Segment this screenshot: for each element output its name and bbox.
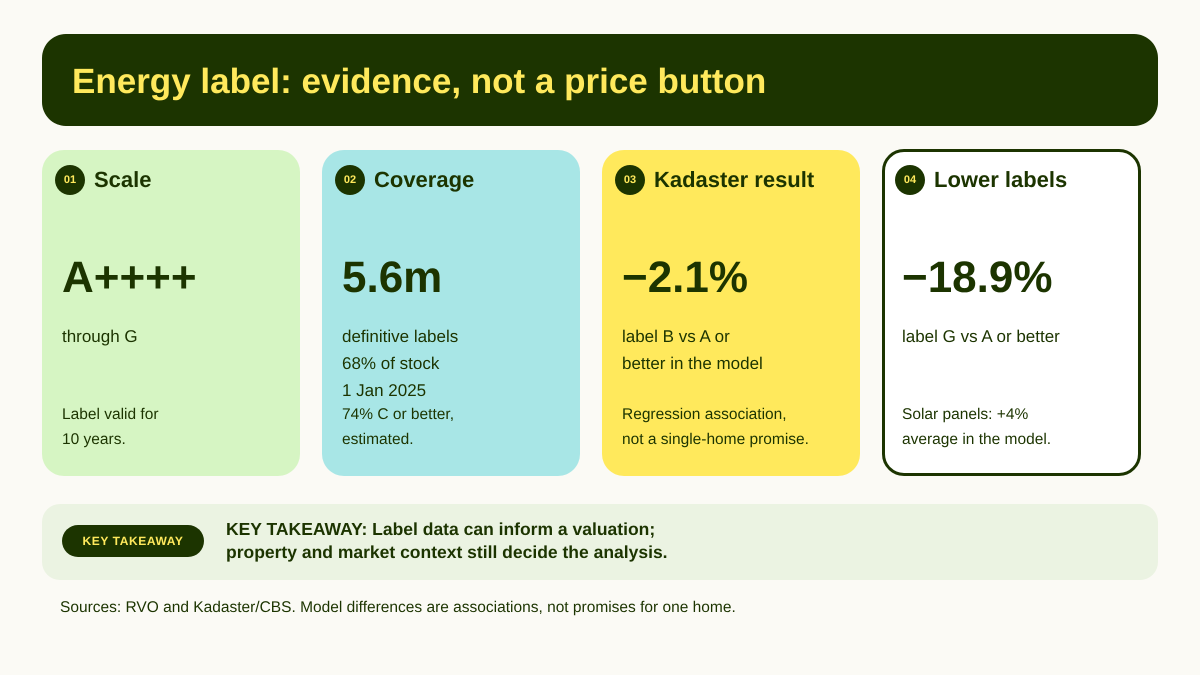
text: sources: Sources: RVO and Kadaster/CBS. Model differences are associations, not promises for one home. (60, 599, 736, 616)
badge 02 (335, 165, 365, 195)
heading: kadaster result: Kadaster result (654, 167, 814, 192)
title banner: Energy label: evidence, not a price button (72, 62, 766, 101)
note: solar panels (902, 406, 1051, 448)
text: takeaway message: KEY TAKEAWAY: Label data can inform a valuation; (226, 519, 655, 539)
pill: key takeaway tag (62, 525, 204, 557)
badge 03 (615, 165, 645, 195)
stat: -2.1%: −2.1% (622, 253, 748, 302)
heading: lower labels: Lower labels (934, 167, 1067, 192)
note: label validity: 10 years. (62, 431, 126, 448)
note: label validity: Label valid for (62, 406, 159, 423)
panel: scale (42, 150, 300, 476)
badge 04: 04 (904, 174, 916, 186)
text: kadaster description (622, 327, 763, 373)
text: takeaway message: property and market context still decide the analysis. (226, 542, 668, 562)
note: regression caveat: not a single-home promise. (622, 431, 809, 448)
badge 03: 03 (624, 174, 636, 186)
note: C or better share: 74% C or better, (342, 406, 454, 423)
badge 01: 01 (64, 174, 76, 186)
heading: coverage: Coverage (374, 167, 474, 192)
text: coverage description (342, 327, 458, 400)
panel: key takeaway (42, 504, 1158, 580)
note: C or better share (342, 406, 454, 448)
text: kadaster description: better in the model (622, 354, 763, 373)
inner content of lower labels (895, 165, 1067, 448)
panel: kadaster result (602, 150, 860, 476)
stat: A++++: A++++ (62, 253, 197, 302)
badge 02: 02 (344, 174, 356, 186)
note: C or better share: estimated. (342, 431, 414, 448)
badge 04 (895, 165, 925, 195)
text: takeaway message (226, 519, 668, 562)
stat: -18.9%: −18.9% (902, 253, 1052, 302)
text: coverage description: 68% of stock (342, 354, 439, 373)
badge 01 (55, 165, 85, 195)
heading: scale: Scale (94, 167, 152, 192)
pill: key takeaway tag: KEY TAKEAWAY (82, 534, 184, 548)
note: regression caveat (622, 406, 809, 448)
text: lower labels description: label G vs A or better (902, 327, 1060, 346)
note: solar panels: average in the model. (902, 431, 1051, 448)
note: solar panels: Solar panels: +4% (902, 406, 1028, 423)
text: coverage description: 1 Jan 2025 (342, 381, 426, 400)
text: coverage description: definitive labels (342, 327, 458, 346)
title banner (42, 34, 1158, 126)
stat: 5.6m: 5.6m (342, 253, 442, 302)
note: label validity (62, 406, 159, 448)
panel: lower labels (882, 149, 1141, 476)
note: regression caveat: Regression association, (622, 406, 787, 423)
panel: coverage (322, 150, 580, 476)
text: kadaster description: label B vs A or (622, 327, 730, 346)
text: scale description: through G (62, 327, 138, 346)
